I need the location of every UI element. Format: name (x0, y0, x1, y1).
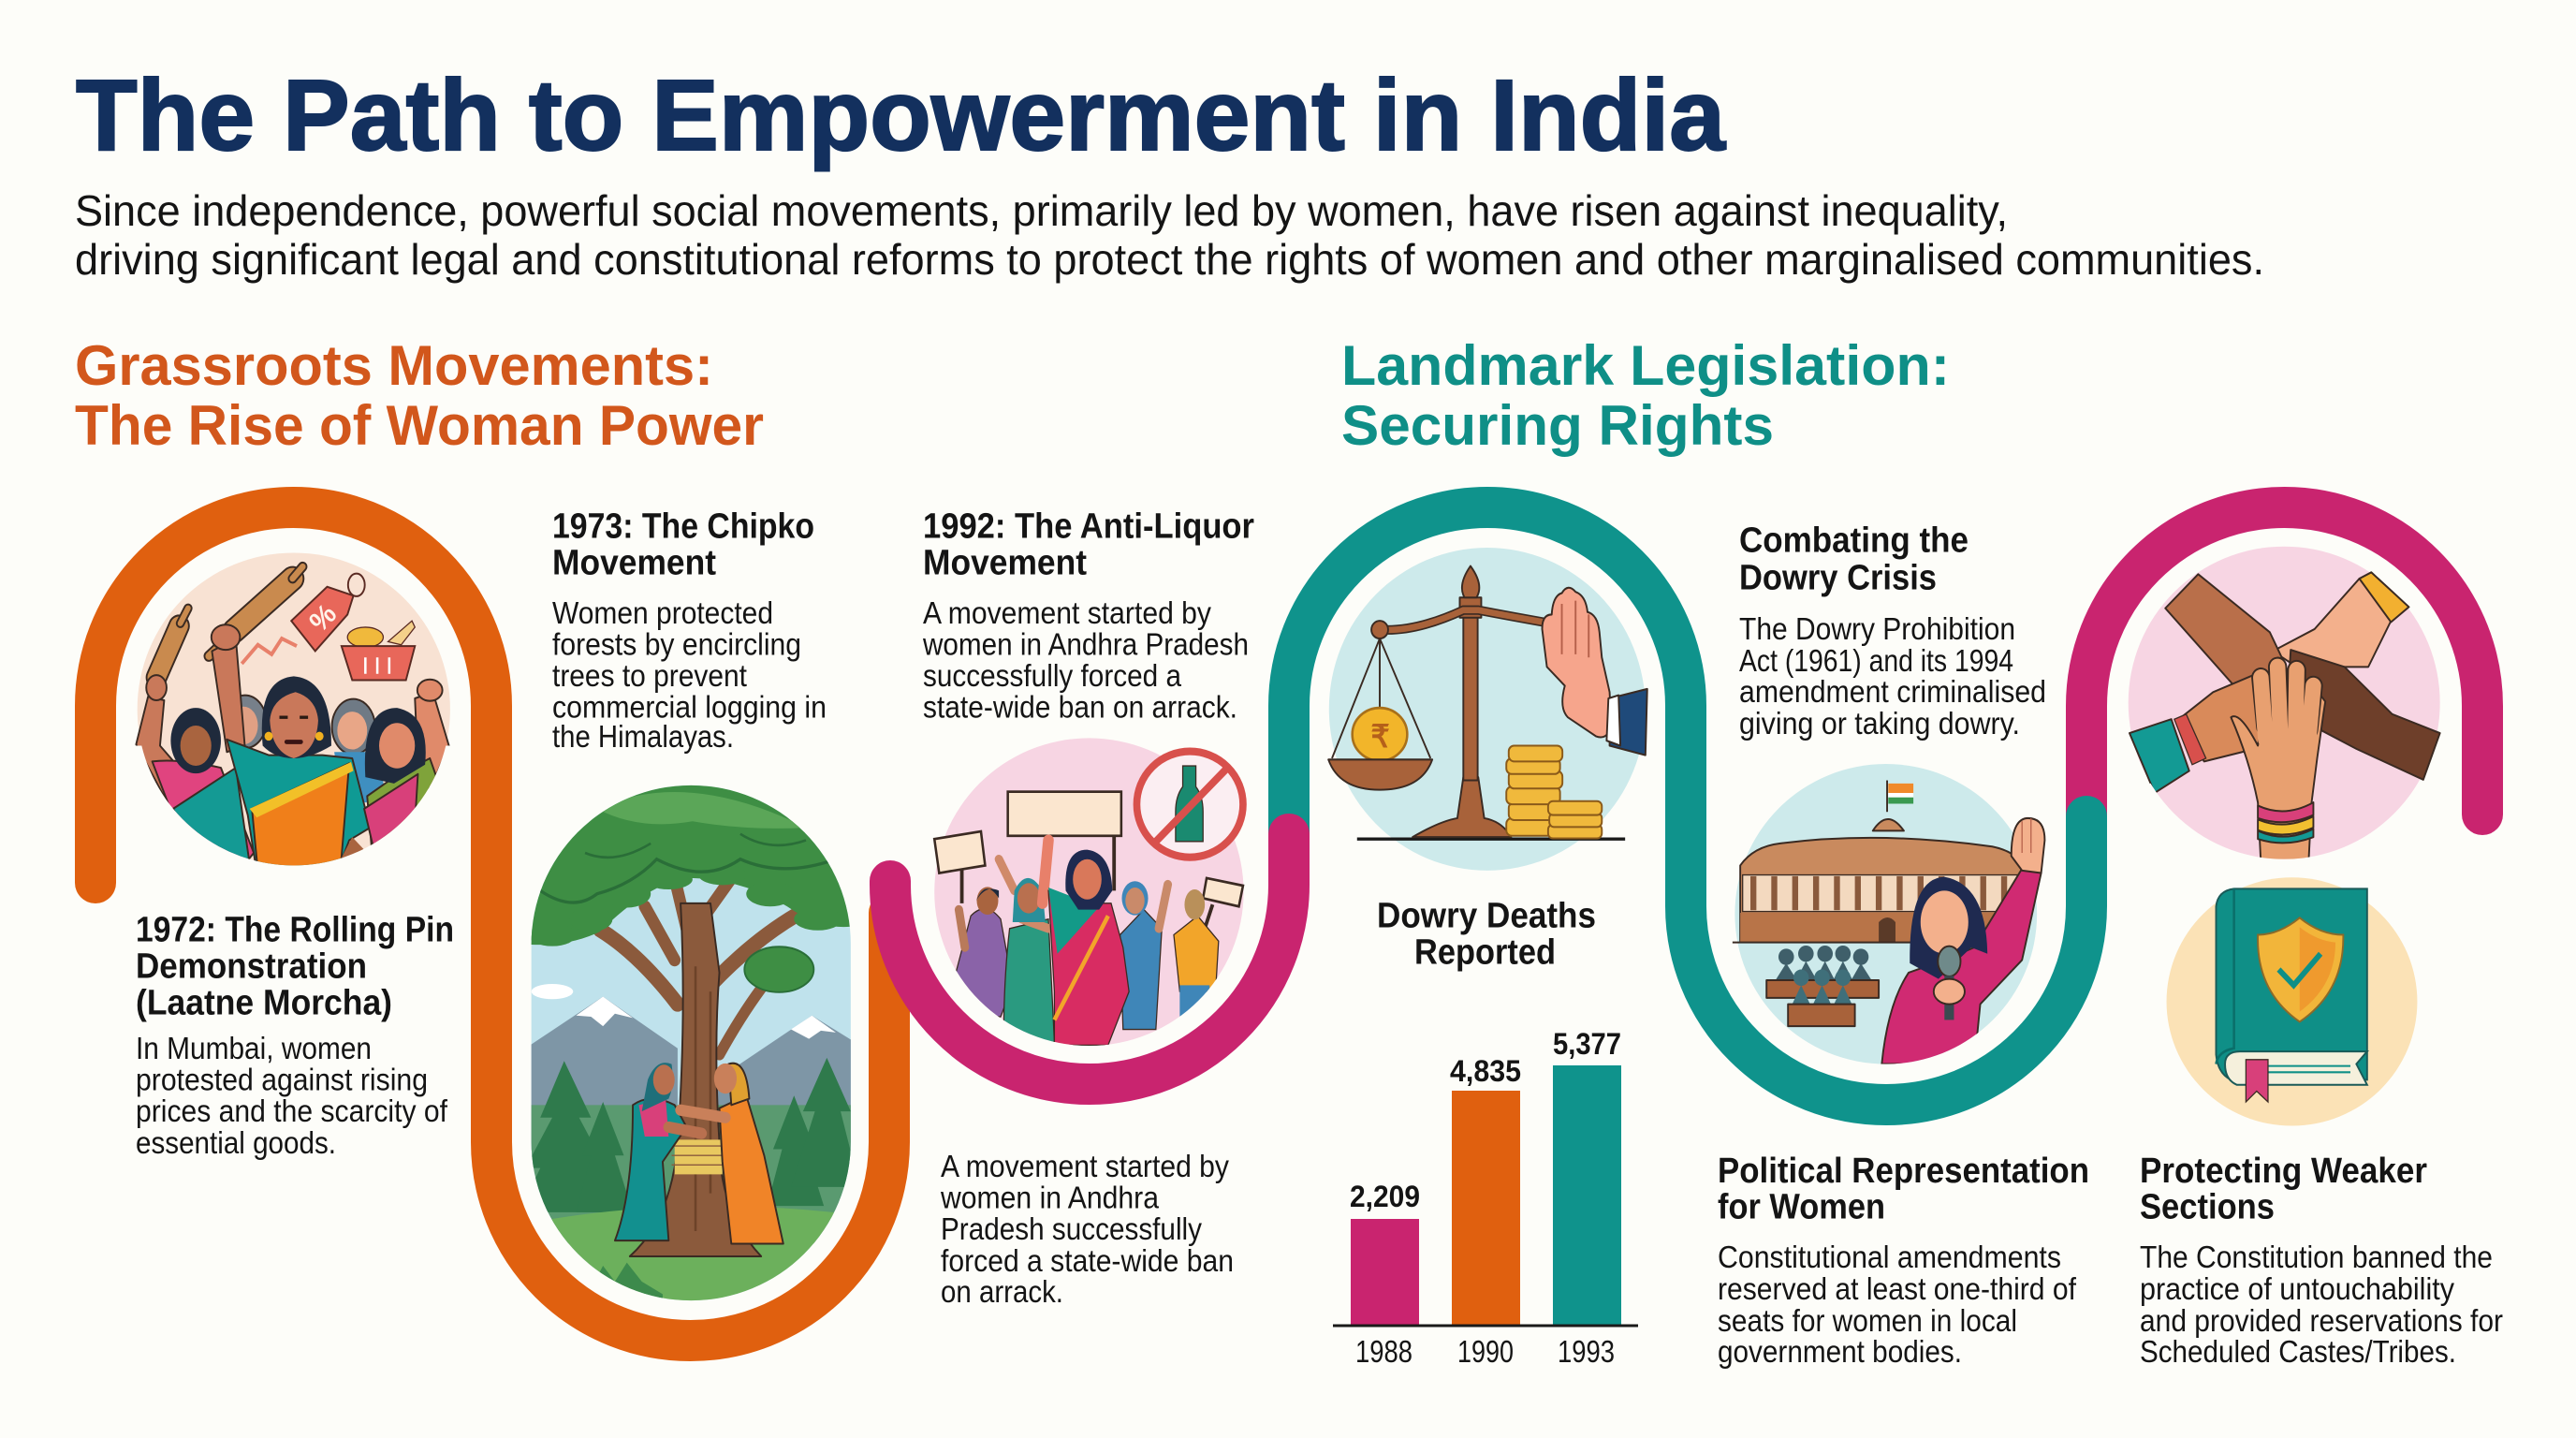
text: protecting weaker sections: Protecting Weaker (2140, 1152, 2427, 1191)
text: 1992 anti-liquor movement: women in Andhra Pradesh (922, 627, 1249, 661)
text: political representation for women: government bodies. (1718, 1334, 1962, 1369)
text: political representation for women: seats for women in local (1718, 1303, 2017, 1338)
heading: grassroots movements (75, 334, 764, 457)
bar 1990: 1990 (1457, 1334, 1514, 1369)
text: political representation for women: reserved at least one-third of (1718, 1271, 2077, 1306)
text: anti-liquor lower description: forced a state-wide ban (941, 1243, 1234, 1278)
text: 1972 rolling pin demonstration: (Laatne Morcha) (136, 983, 392, 1022)
illustration: book with shield (2167, 877, 2417, 1126)
text: anti-liquor lower description: on arrack. (941, 1274, 1063, 1309)
text: combating the dowry crisis: The Dowry Prohibition (1739, 611, 2015, 646)
bar 1990: 4,835 (1450, 1054, 1521, 1088)
text: 1992 anti-liquor movement: Movement (923, 543, 1087, 582)
text: 1972 rolling pin demonstration: In Mumbai, women (136, 1031, 372, 1065)
text: anti-liquor lower description: women in Andhra (940, 1180, 1160, 1215)
title: The Path to Empowerment in India (76, 58, 1726, 171)
text: 1972 rolling pin demonstration: essential goods. (136, 1125, 336, 1160)
bar 1988: 1988 (1355, 1334, 1412, 1369)
text: combating the dowry crisis (1739, 521, 2046, 741)
text: 1992 anti-liquor movement: A movement started by (923, 595, 1211, 630)
text: combating the dowry crisis: Combating the (1739, 521, 1969, 560)
winding path ribbon (95, 507, 2482, 1341)
text: 1973 chipko movement: forests by encircling (552, 627, 801, 661)
text: 1992 anti-liquor movement: state-wide ban on arrack. (923, 689, 1237, 725)
heading: grassroots movements: The Rise of Woman Power (75, 394, 764, 457)
chart heading: Dowry Deaths (1377, 897, 1596, 936)
text: 1973 chipko movement: the Himalayas. (552, 719, 734, 754)
illustration: chipko tree hugging (520, 781, 859, 1307)
bar 1993: 5,377 (1553, 1027, 1621, 1061)
text: 1973 chipko movement: commercial logging in (552, 689, 827, 725)
bar 1988: 2,209 (1350, 1180, 1420, 1213)
text: 1972 rolling pin demonstration (136, 910, 454, 1160)
bar 1990 (1450, 1054, 1521, 1369)
illustration: anti-liquor protest (934, 738, 1244, 1046)
text: political representation for women: Political Representation (1718, 1152, 2089, 1191)
text: anti-liquor lower description (940, 1149, 1234, 1309)
heading: grassroots movements: Grassroots Movements: (75, 334, 713, 397)
subtitle: driving significant legal and constitutional reforms to protect the rights of women and other marginalised communities. (75, 235, 2264, 284)
illustration: parliament and woman speaker (1733, 764, 2044, 1064)
text: political representation for women (1718, 1152, 2089, 1369)
text: protecting weaker sections (2140, 1152, 2503, 1369)
text: 1973 chipko movement: trees to prevent (552, 658, 747, 693)
text: protecting weaker sections: practice of untouchability (2140, 1271, 2454, 1306)
illustration: scales of justice and stopping hand: ₹ (1370, 718, 1390, 754)
text: 1992 anti-liquor movement: 1992: The Anti-Liquor (923, 507, 1254, 547)
text: 1973 chipko movement (552, 507, 827, 754)
text: 1972 rolling pin demonstration: Demonstration (136, 947, 367, 987)
bar 1988 (1350, 1180, 1420, 1369)
illustration: scales of justice and stopping hand (1328, 548, 1647, 871)
text: 1973 chipko movement: 1973: The Chipko (552, 507, 814, 547)
ribbon: magenta end section (2086, 507, 2482, 843)
chart heading (1377, 897, 1596, 972)
text: 1972 rolling pin demonstration: 1972: The Rolling Pin (136, 910, 454, 949)
text: 1992 anti-liquor movement (922, 507, 1254, 725)
text: combating the dowry crisis: Dowry Crisis (1739, 558, 1937, 597)
text: combating the dowry crisis: giving or taking dowry. (1739, 706, 2020, 741)
ribbon: orange section (95, 507, 889, 1341)
illustration: rolling pin protest (136, 552, 450, 872)
ribbon: teal section (1289, 507, 2086, 1105)
ribbon: magenta middle section (890, 834, 1289, 1084)
text: combating the dowry crisis: Act (1961) and its 1994 (1739, 643, 2013, 678)
text: 1972 rolling pin demonstration: prices and the scarcity of (136, 1093, 448, 1128)
chart heading: Reported (1414, 932, 1556, 972)
illustration: joined hands (2129, 547, 2440, 862)
text: protecting weaker sections: Sections (2140, 1187, 2275, 1226)
text: 1973 chipko movement: Movement (552, 543, 716, 582)
subtitle: Since independence, powerful social movements, primarily led by women, have risen against inequality, (75, 186, 2008, 235)
bar 1993: 1993 (1558, 1334, 1615, 1369)
text: political representation for women: for Women (1718, 1187, 1885, 1226)
heading: landmark legislation: Securing Rights (1341, 394, 1774, 457)
text: political representation for women: Constitutional amendments (1718, 1240, 2061, 1274)
illustration: rolling pin protest: % (304, 597, 343, 638)
text: 1972 rolling pin demonstration: protested against rising (136, 1062, 428, 1097)
text: combating the dowry crisis: amendment criminalised (1739, 674, 2046, 709)
heading: landmark legislation (1341, 334, 1950, 457)
text: anti-liquor lower description: A movement started by (941, 1149, 1229, 1183)
text: protecting weaker sections: The Constitution banned the (2140, 1240, 2493, 1274)
subtitle (75, 186, 2264, 284)
text: protecting weaker sections: Scheduled Castes/Tribes. (2140, 1334, 2456, 1369)
bar 1993 (1553, 1027, 1621, 1369)
chart: dowry deaths reported (1333, 897, 1638, 1369)
heading: landmark legislation: Landmark Legislation: (1341, 334, 1950, 397)
text: 1992 anti-liquor movement: successfully forced a (923, 658, 1182, 693)
text: anti-liquor lower description: Pradesh successfully (941, 1211, 1202, 1246)
text: 1973 chipko movement: Women protected (552, 595, 773, 630)
text: protecting weaker sections: and provided reservations for (2140, 1303, 2503, 1338)
